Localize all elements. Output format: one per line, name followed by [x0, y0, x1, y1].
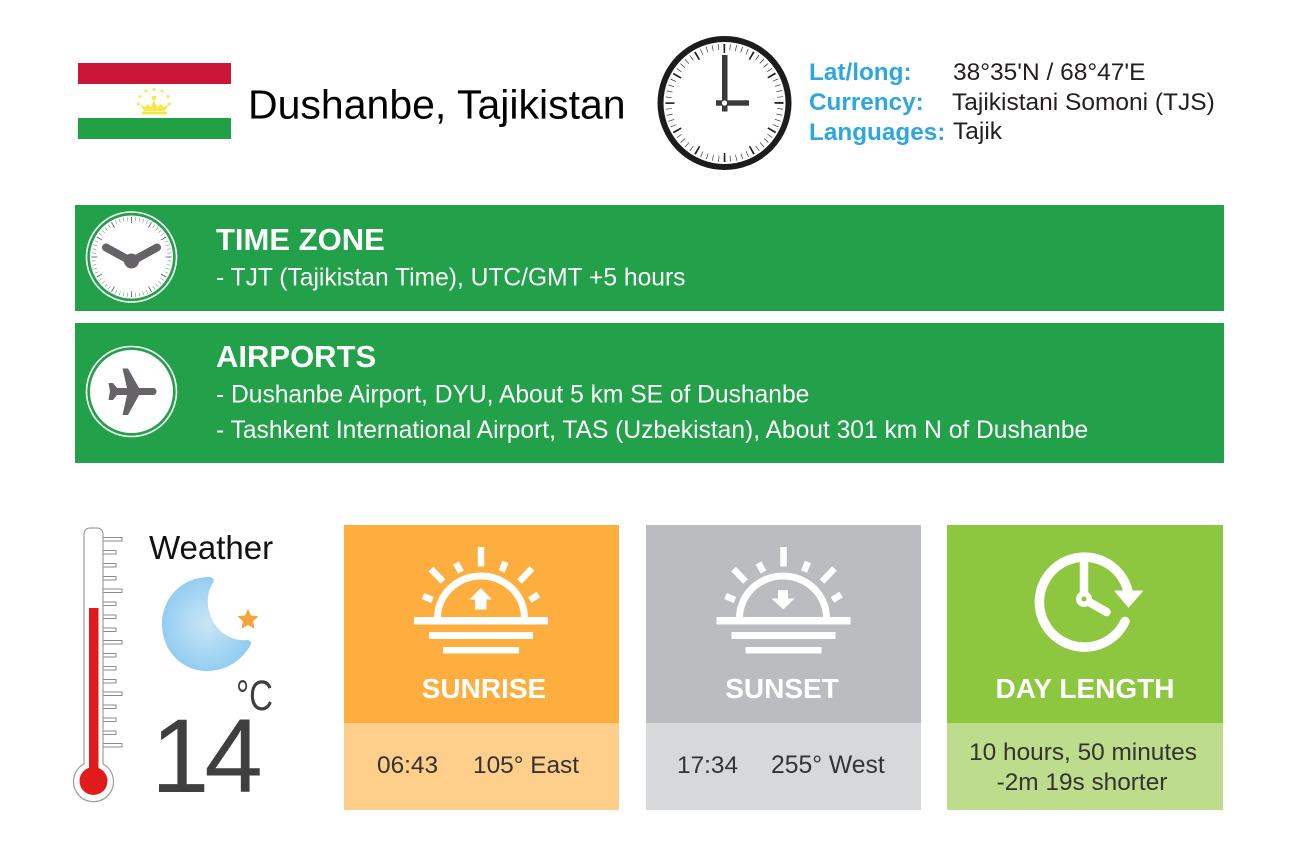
- label: sunrise: SUNRISE: [422, 673, 546, 704]
- panel: airports: [75, 323, 1224, 463]
- icon: time zone clock: [86, 212, 176, 302]
- panel: day length: [947, 525, 1223, 810]
- icon: crescent moon and star: [162, 577, 258, 671]
- label and value: latitude and longitude: [809, 59, 1145, 86]
- label and value: currency: Tajikistani Somoni (TJS): [952, 89, 1215, 116]
- panel: sunrise: [344, 525, 619, 810]
- icon: thermometer: [74, 528, 122, 802]
- heading: time zone: TIME ZONE: [216, 222, 385, 257]
- heading: weather: Weather: [149, 529, 273, 566]
- sunset time and bearing: 17:34: [677, 752, 738, 779]
- icon: airplane: [86, 346, 176, 436]
- label and value: currency: Currency:: [809, 89, 924, 116]
- panel: sunset: [646, 525, 921, 810]
- day length values: -2m 19s shorter: [997, 769, 1167, 796]
- sunset time and bearing: 255° West: [771, 752, 885, 779]
- text: Tashkent International Airport: - Tashkent International Airport, TAS (Uzbekistan), About 301 km N of Dushanbe: [216, 417, 1088, 444]
- label and value: latitude and longitude: Lat/long:: [809, 59, 912, 86]
- sunset time and bearing: [677, 752, 885, 779]
- panel: time zone: [75, 205, 1224, 311]
- text: Dushanbe Airport: - Dushanbe Airport, DYU, About 5 km SE of Dushanbe: [216, 382, 809, 408]
- day length values: [969, 739, 1197, 796]
- unit: degrees Celsius: °C: [236, 672, 273, 720]
- icon: sunrise: [414, 547, 548, 654]
- icon: analog clock: [660, 39, 788, 167]
- label and value: languages: Tajik: [953, 118, 1003, 145]
- icon: day length clock: [1039, 557, 1142, 647]
- text: time zone detail: - TJT (Tajikistan Time), UTC/GMT +5 hours: [216, 264, 685, 292]
- sunrise time and bearing: 105° East: [473, 752, 579, 779]
- title: Dushanbe, Tajikistan: [248, 82, 626, 128]
- location details: [809, 59, 1215, 146]
- header: flag of Tajikistan: [78, 63, 231, 139]
- sunrise time and bearing: [377, 752, 579, 779]
- icon: sunset: [716, 547, 850, 654]
- day length values: 10 hours, 50 minutes: [969, 739, 1197, 766]
- label: day length: DAY LENGTH: [996, 673, 1174, 704]
- heading: airports: AIRPORTS: [216, 339, 376, 374]
- sunrise time and bearing: 06:43: [377, 752, 438, 779]
- label and value: languages: Languages:: [809, 119, 945, 146]
- temperature value: 14: [151, 698, 260, 815]
- label and value: languages: [809, 118, 1003, 146]
- label and value: latitude and longitude: 38°35'N / 68°47'E: [953, 59, 1145, 86]
- label and value: currency: [809, 89, 1215, 116]
- label: sunset: SUNSET: [725, 673, 839, 704]
